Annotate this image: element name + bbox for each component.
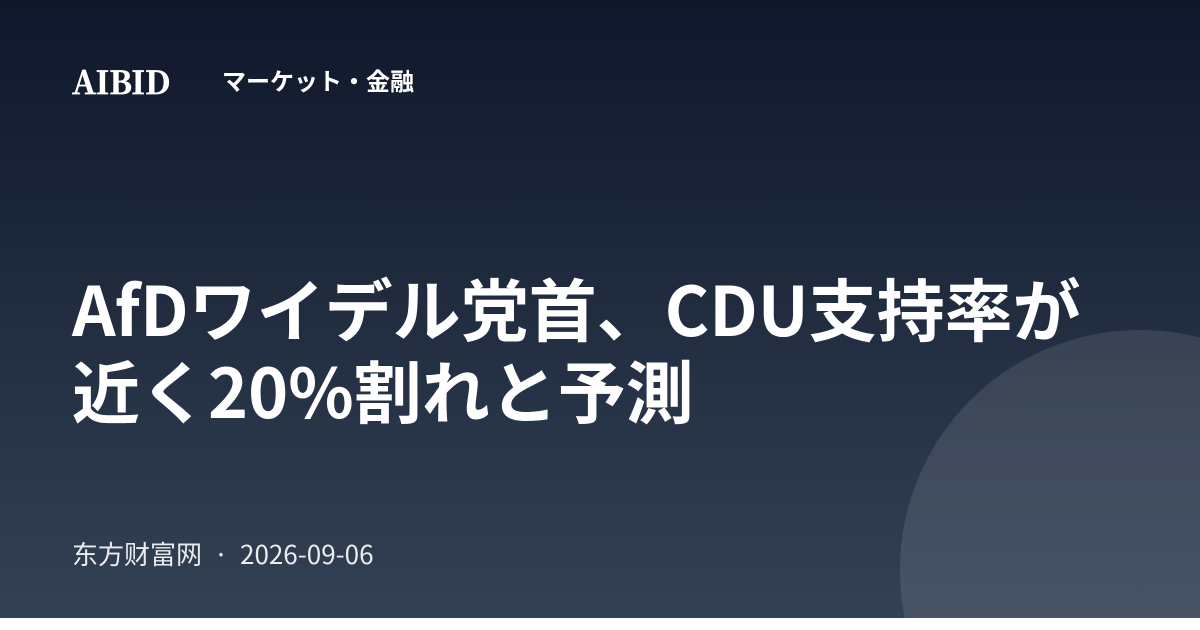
title: 近く20%割れと予測 [72, 339, 694, 438]
title: AfDワイデル党首、CDU支持率が [72, 257, 1081, 356]
decorative circle [900, 330, 1200, 618]
category label: マーケット・金融 [222, 62, 414, 97]
brand name: AIBID [72, 58, 170, 104]
source and date: 东方财富网 2026-09-06 [72, 535, 374, 572]
source and date: · [214, 535, 228, 572]
title [72, 257, 1081, 438]
